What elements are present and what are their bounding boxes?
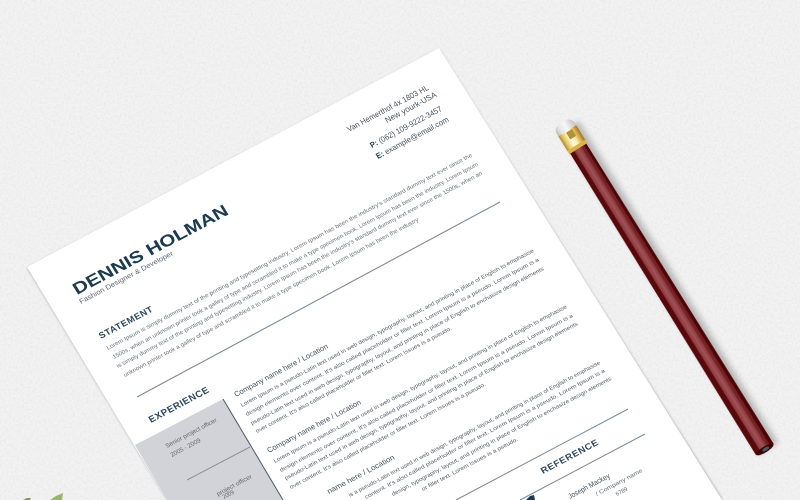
statement line 4: unknown printer took a galley of type and scrambled it to make a type specimen book. Lorem Ipsum has been the industry <box>123 217 420 379</box>
sidebar entries <box>164 417 253 500</box>
job block 3 <box>325 360 613 500</box>
statement heading: STATEMENT <box>97 304 155 341</box>
job 2 heading: Company name here / Location <box>265 398 363 455</box>
job 2 line 2: design elements over content. It's also called placeholder or filler text. Lorem Ipsum is a pseudo. Lorem Ipsum is a <box>279 313 575 474</box>
job 3 line 1: is a pseudo-Latin text used in web design, typography, layout, and printing in place of English to emphasise <box>348 360 602 499</box>
experience sidebar <box>135 399 283 500</box>
eraser <box>553 117 577 138</box>
job title: Fashion Designer & Developer <box>78 250 175 306</box>
role 2: project officer <box>215 473 253 498</box>
job 1 line 2: design elements over content. It's also called placeholder or filler text. Lorem Ipsum is a pseudo. Lorem Ipsum is a <box>245 257 541 418</box>
job 2 line 4: over content. It's also called placeholder or filler text. Lorem Issues is a pseudo. <box>289 382 488 491</box>
phone: P: (062) 109-9222-3457 <box>368 104 444 150</box>
reference marker <box>526 495 535 500</box>
job 2 line 1: Lorem Ipsum is a pseudo-Latin text used in web design, typography, layout, and printing in place of English to emphasise <box>273 304 568 465</box>
pencil shadow <box>560 121 778 454</box>
reference role: / Company name <box>595 468 644 498</box>
job block 1 <box>232 248 546 435</box>
statement line 1: Lorem Ipsum is simply dummy text of the printing and typesetting industry. Lorem Ipsum has been the industry's standard dummy text ever since the <box>106 153 474 352</box>
leaf tips in the corner <box>23 493 63 500</box>
pencil <box>553 114 779 458</box>
sidebar right rule <box>223 399 283 500</box>
resume sheet <box>27 48 723 500</box>
experience heading: EXPERIENCE <box>147 385 212 426</box>
pencil body <box>569 143 774 455</box>
contact block <box>345 83 451 161</box>
pencil end core <box>761 446 770 452</box>
address line 2: New yourk-USA <box>383 90 439 125</box>
role 1: Senior project officer <box>164 417 218 450</box>
statement section <box>97 153 484 379</box>
sheet rule lines and text <box>69 83 645 500</box>
job 3 heading: name here / Location <box>325 453 396 496</box>
statement line 3: is simply dummy text of the printing and typesetting industry. Lorem Ipsum has been the industry's standard dummy text ever since the 1500s, when an <box>116 171 484 370</box>
job 1 heading: Company name here / Location <box>232 342 330 399</box>
paper <box>27 48 722 500</box>
job 1 line 3: pseudo-Latin text used in web design, typography, layout, and printing in place of English to enchasize design elements <box>250 266 546 427</box>
ferrule band <box>567 140 587 155</box>
reference name: Joseph Mackey <box>566 471 612 500</box>
job 1 line 4: over content. It's also called placeholder or filler text. Lorem Issues is a pseudo. <box>255 326 454 435</box>
ferrule patch <box>566 129 576 140</box>
reference top rule <box>456 409 628 500</box>
paper shadow <box>27 49 723 500</box>
reference section <box>526 437 644 500</box>
address line 1: Van Hemerthof 4x 1803 HL <box>345 83 431 134</box>
job block 2 <box>265 304 580 491</box>
reference heading: REFERENCE <box>539 437 601 476</box>
statement line 2: 1500s, when an unknown printer took a galley of type and scrambled it to make a type specimen book. Lorem Ipsum has been the industry. Lorem Ipsum <box>112 162 480 361</box>
job 3 line 2: content. It's also called placeholder or filler text. Lorem Ipsum is a pseudo. Lorem Ipsum is a <box>364 368 607 500</box>
ferrule <box>558 125 586 152</box>
sidebar divider <box>187 447 250 480</box>
pencil end <box>755 442 775 457</box>
name heading: DENNIS HOLMAN <box>69 201 232 298</box>
email: E: example@email.com <box>374 115 451 161</box>
reference phone: 6789 <box>615 487 629 498</box>
job 3 line 4: or filler text. Lorem Issues is a pseudo. <box>421 437 520 493</box>
reference bottom rule <box>520 434 645 500</box>
divider under statement <box>137 202 500 397</box>
job 1 line 1: Lorem Ipsum is a pseudo-Latin text used in web design, typography, layout, and printing in place of English to emphasise <box>240 248 535 409</box>
job 2 line 3: pseudo-Latin text used in web design, typography, layout, and printing in place of English to enchasize design elements <box>284 321 580 482</box>
dates 1: 2005 - 2009 <box>169 437 203 459</box>
job 3 line 3: design, typography, layout, and printing in place of English to enchasize design elements <box>391 376 613 498</box>
